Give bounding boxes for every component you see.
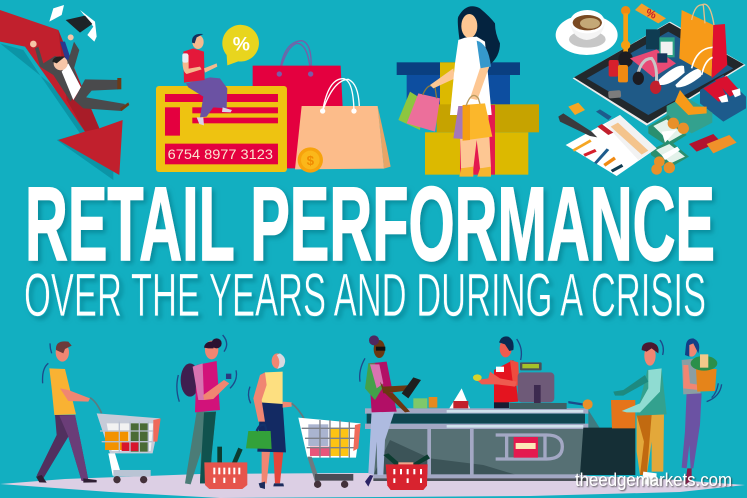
report sheet with bar chart xyxy=(566,115,657,176)
percent tag xyxy=(635,3,666,23)
credit card: 6754 8977 3123 xyxy=(168,146,273,162)
watermark: theedgemarkets.com xyxy=(575,470,732,490)
red basket with bottles xyxy=(204,447,247,489)
woman with backpack and phone xyxy=(177,335,236,484)
groceries on counter xyxy=(413,388,593,409)
illustration: falling businessman on red arrow xyxy=(0,5,129,180)
tablet xyxy=(573,22,746,126)
coin: $ xyxy=(307,153,315,168)
coin xyxy=(298,147,323,173)
marker pens and erasers xyxy=(558,103,613,137)
cashier and cash register xyxy=(473,336,567,409)
credit cards xyxy=(689,134,737,153)
speech bubble with percent xyxy=(222,25,259,65)
money stacks and coins xyxy=(648,115,689,175)
coffee cup xyxy=(556,10,618,55)
cans, headphones and boxes xyxy=(609,29,701,94)
shopper paying at counter xyxy=(360,335,421,487)
shoeboxes and shoes xyxy=(667,75,746,133)
woman with grocery bag xyxy=(682,338,722,485)
illustration: woman with shopping bags and gift boxes xyxy=(397,6,539,177)
bags in right hand xyxy=(453,95,492,141)
orange shopping bag on tablet xyxy=(679,4,727,78)
checkout counter xyxy=(365,408,635,481)
hookah xyxy=(618,6,633,67)
shopper with trolley xyxy=(36,341,161,483)
older woman with trolley xyxy=(246,353,361,489)
floor xyxy=(0,473,745,498)
second red basket xyxy=(383,453,430,490)
peach shopping bag xyxy=(295,79,391,169)
percent tag: % xyxy=(644,7,658,22)
woman figure xyxy=(430,6,500,177)
illustration: online shopping on tablet with coffee, goods and money xyxy=(556,3,746,176)
bags in left hand xyxy=(398,86,440,132)
seated shopper xyxy=(182,34,232,125)
credit card xyxy=(156,86,287,172)
illustration: credit card with shopper and shopping bags xyxy=(156,25,391,173)
man with parcel xyxy=(611,340,667,484)
speech bubble with percent: % xyxy=(233,35,250,56)
red shopping bag xyxy=(253,41,343,168)
